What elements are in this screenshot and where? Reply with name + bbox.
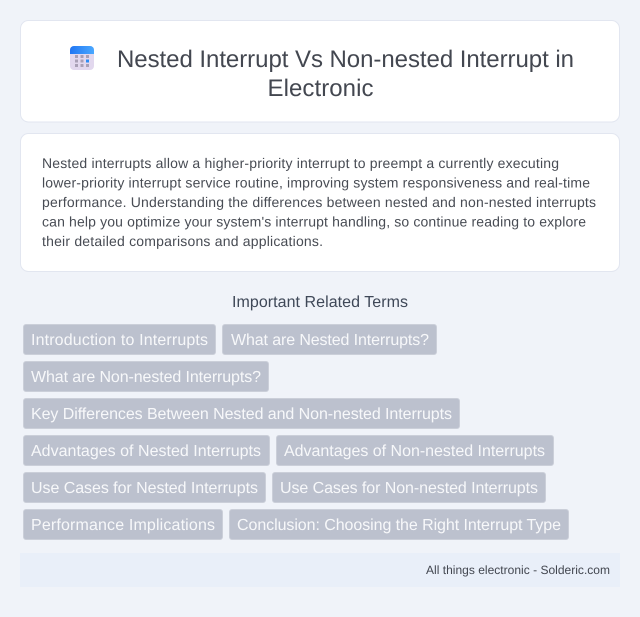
- text block: introduction: can help you optimize your system's interrupt handling, so continue reading to explore: [42, 214, 586, 230]
- tag: advantages of nested interrupts: [24, 436, 270, 466]
- text block: introduction: Nested interrupts allow a higher-priority interrupt to preempt a currently executing: [42, 155, 559, 171]
- title: Electronic: [268, 75, 374, 102]
- tag: what are non-nested interrupts: [24, 362, 268, 392]
- text block: introduction: performance. Understanding the differences between nested and non-nested interrupts: [42, 194, 596, 210]
- tag: advantages of nested interrupts: Advantages of Nested Interrupts: [31, 443, 261, 460]
- heading: important related terms: Important Related Terms: [232, 294, 408, 311]
- tag: what are nested interrupts: [222, 324, 436, 354]
- tag: introduction to interrupts: Introduction to Interrupts: [31, 332, 208, 349]
- tag: use cases for non-nested interrupts: Use Cases for Non-nested Interrupts: [280, 480, 538, 497]
- tag list: [24, 324, 568, 540]
- tag: advantages of non-nested interrupts: [276, 436, 554, 466]
- footer: All things electronic - Solderic.com: [426, 563, 610, 577]
- panel: introduction: [20, 134, 620, 272]
- tag: key differences: [24, 398, 460, 428]
- tag: use cases for nested interrupts: [24, 472, 266, 502]
- panel: title card: [20, 20, 620, 122]
- tag: introduction to interrupts: [24, 324, 216, 354]
- footer: [20, 553, 620, 587]
- text block: introduction: their detailed comparisons and applications.: [42, 233, 323, 249]
- tag: performance implications: Performance Implications: [31, 517, 215, 534]
- tag: advantages of non-nested interrupts: Advantages of Non-nested Interrupts: [284, 443, 545, 460]
- tag: what are non-nested interrupts: What are Non-nested Interrupts?: [31, 369, 261, 386]
- icon: calendar: [70, 46, 94, 70]
- tag: key differences: Key Differences Between Nested and Non-nested Interrupts: [31, 406, 452, 423]
- tag: conclusion: Conclusion: Choosing the Right Interrupt Type: [237, 517, 561, 534]
- tag: conclusion: [230, 510, 568, 540]
- title: Nested Interrupt Vs Non-nested Interrupt in: [117, 46, 574, 73]
- text block: introduction: lower-priority interrupt service routine, improving system responsiveness and real-time: [42, 174, 590, 190]
- tag: what are nested interrupts: What are Nested Interrupts?: [231, 332, 429, 349]
- tag: performance implications: [24, 510, 222, 540]
- tag: use cases for nested interrupts: Use Cases for Nested Interrupts: [31, 480, 258, 497]
- tag: use cases for non-nested interrupts: [272, 472, 546, 502]
